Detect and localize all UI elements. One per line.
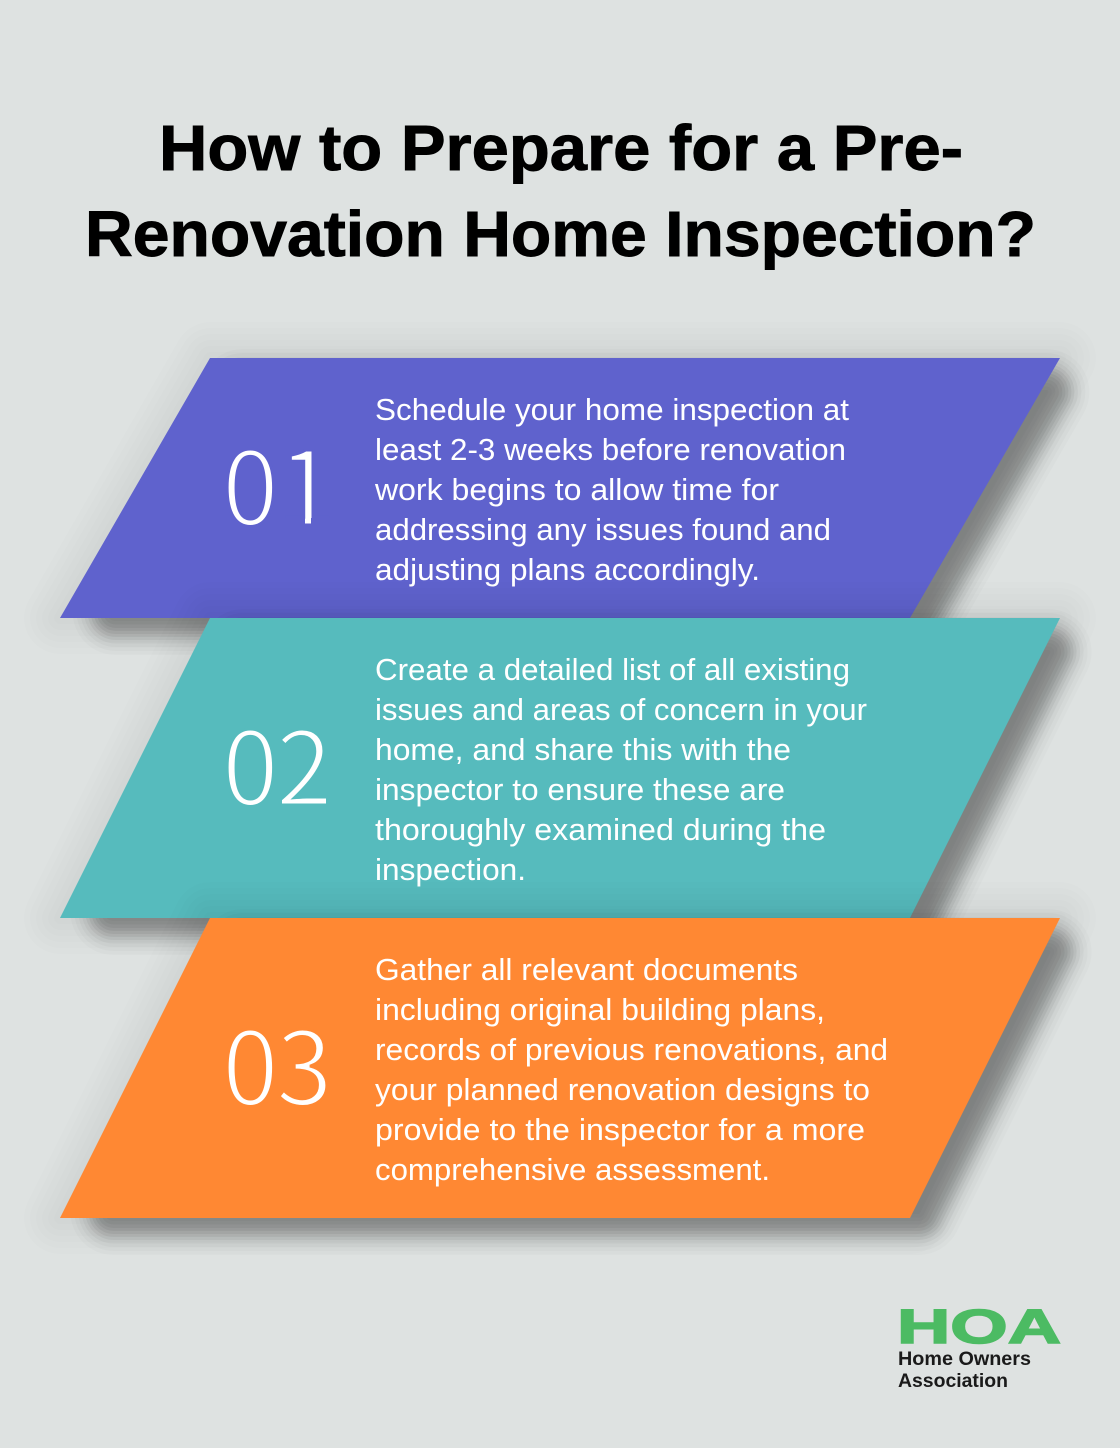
step 03 shadow: [60, 918, 1060, 1218]
panel: step 02: [60, 618, 1060, 918]
step 03 text: records of previous renovations, and: [375, 1032, 888, 1067]
step 03 text: comprehensive assessment.: [375, 1152, 770, 1187]
step 01 text: adjusting plans accordingly.: [375, 552, 760, 587]
step 01 text: least 2-3 weeks before renovation: [375, 432, 846, 467]
step 02 text: Create a detailed list of all existing: [375, 652, 850, 687]
panel: step 03: [60, 918, 1060, 1218]
step 02 shadow: [60, 618, 1060, 918]
step 03 text: including original building plans,: [375, 992, 825, 1027]
step 03 text: your planned renovation designs to: [375, 1072, 870, 1107]
step 01 shadow: [60, 358, 1060, 618]
logo name line 2: Association: [898, 1371, 1008, 1392]
step 02 banner shape: [60, 618, 1060, 918]
logo name line 1: Home Owners: [898, 1349, 1031, 1370]
step 03 text: [375, 952, 888, 1187]
step 01 banner shape: [60, 358, 1060, 618]
step 02 number: 02: [222, 688, 333, 835]
title: [85, 112, 1036, 270]
step 03 banner shape: [60, 918, 1060, 1218]
step 01 text: Schedule your home inspection at: [375, 392, 849, 427]
title: How to Prepare for a Pre-: [159, 112, 963, 184]
step 03 text: provide to the inspector for a more: [375, 1112, 865, 1147]
step 02 text: home, and share this with the: [375, 732, 791, 767]
logo mark: HOA: [897, 1301, 1061, 1354]
step 01 text: work begins to allow time for: [374, 472, 779, 507]
step 03 text: Gather all relevant documents: [375, 952, 798, 987]
step 02 text: issues and areas of concern in your: [375, 692, 867, 727]
step 02 text: inspection.: [375, 852, 526, 887]
step 02 text: thoroughly examined during the: [375, 812, 826, 847]
step 01 text: addressing any issues found and: [375, 512, 831, 547]
step 02 text: inspector to ensure these are: [375, 772, 785, 807]
step 02 text: [375, 652, 867, 887]
title: Renovation Home Inspection?: [85, 198, 1036, 270]
step 01 text: [374, 392, 849, 587]
panel: step 01: [60, 358, 1060, 618]
step 03 number: 03: [222, 988, 333, 1135]
step 01 number: 01: [222, 408, 335, 555]
logo: HOA: [897, 1301, 1061, 1392]
